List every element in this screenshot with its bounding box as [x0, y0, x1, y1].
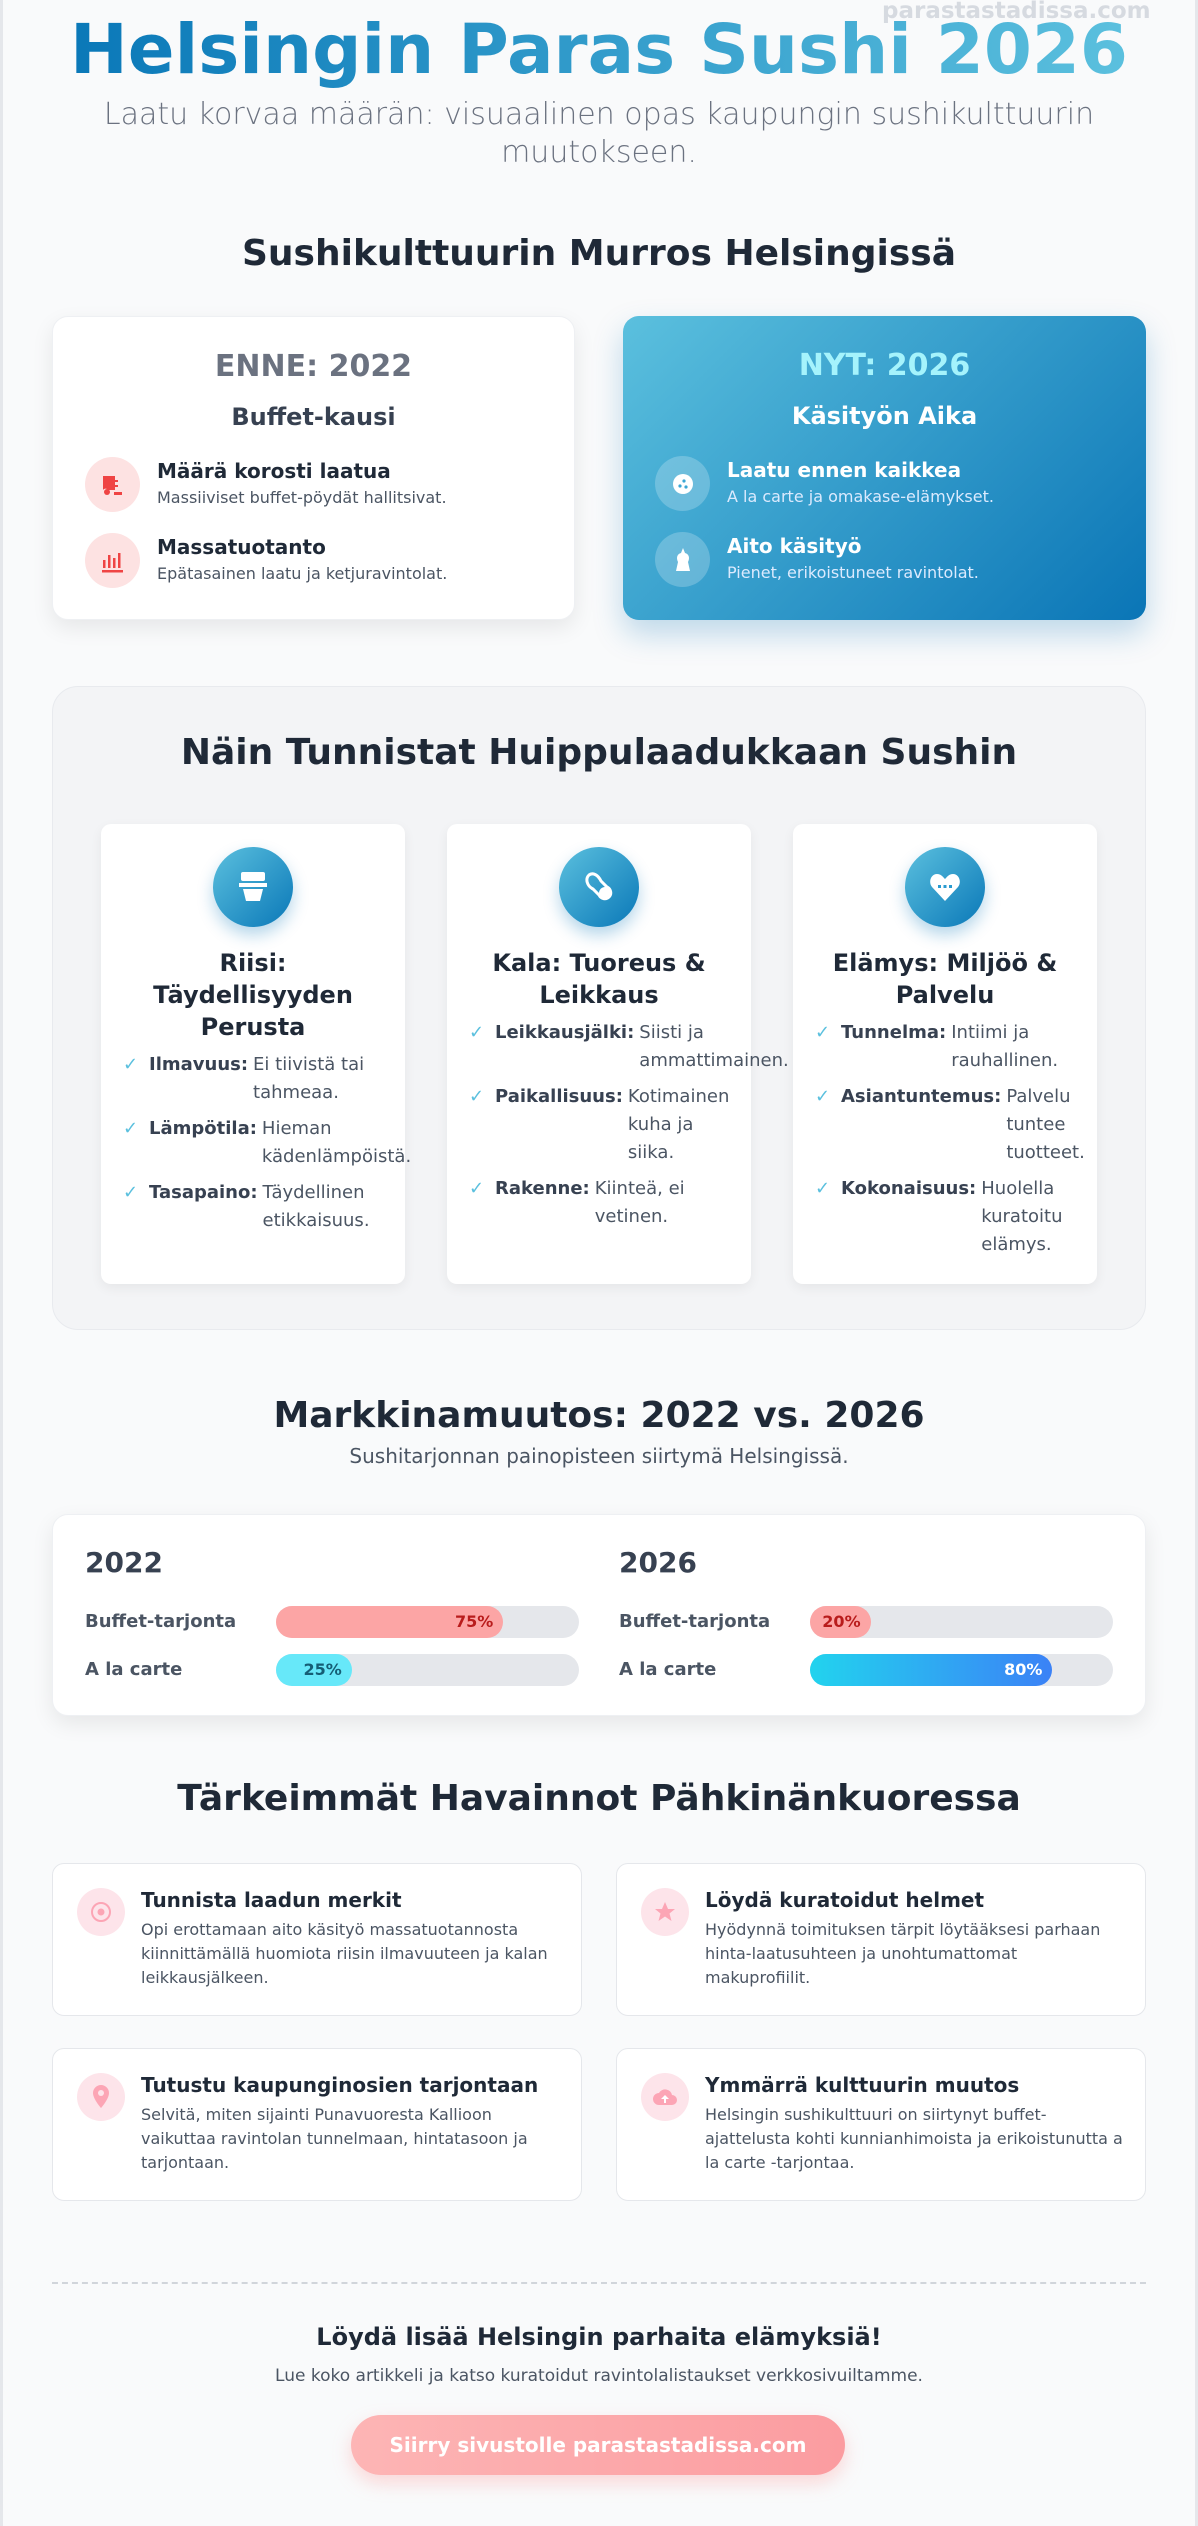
list: kala: Kiinteä, ei vetinen.	[595, 1178, 685, 1227]
card: elämys: Elämys: Miljöö &	[833, 949, 1057, 977]
chart 2022: 75%	[455, 1612, 493, 1631]
list: riisi: Ei tiivistä tai tahmeaa.	[253, 1054, 364, 1103]
item: aito: Pienet, erikoistuneet ravintolat.	[727, 563, 979, 582]
chart 2026	[619, 1546, 1113, 1686]
chart 2022: A la carte	[85, 1659, 182, 1680]
now heading: NYT: 2026	[799, 348, 970, 383]
list: kala: Siisti ja ammattimainen.	[639, 1022, 789, 1071]
list: riisi: Tasapaino:	[149, 1182, 258, 1203]
item: laatu: A la carte ja omakase-elämykset.	[727, 487, 994, 506]
panel: before 2022	[52, 316, 575, 620]
list: kala: Rakenne:	[495, 1178, 590, 1199]
card: löydä: Löydä kuratoidut helmet	[705, 1888, 984, 1912]
list: riisi: Hieman kädenlämpöistä.	[262, 1118, 411, 1167]
card: kala: Leikkaus	[539, 981, 659, 1009]
card: ymmärrä	[616, 2048, 1146, 2201]
card: tutustu: Tutustu kaupunginosien tarjontaan	[141, 2073, 538, 2097]
item: aito	[655, 532, 979, 587]
cta text: Lue koko artikkeli ja katso kuratoidut ravintolalistaukset verkkosivuiltamme.	[275, 2366, 923, 2386]
heading: key findings: Tärkeimmät Havainnot Pähkinänkuoressa	[177, 1778, 1021, 1819]
list: elämys: Palvelu tuntee tuotteet.	[1006, 1086, 1085, 1163]
list: riisi: Ilmavuus:	[149, 1054, 248, 1075]
list: kala: Kotimainen kuha ja siika.	[628, 1086, 729, 1163]
chart 2026: 80%	[1004, 1660, 1042, 1679]
list: elämys	[815, 1022, 1085, 1255]
chart 2022: 2022	[85, 1546, 163, 1579]
card: riisi: Täydellisyyden	[153, 981, 353, 1009]
list: elämys: Kokonaisuus:	[841, 1178, 976, 1199]
icon: cloud	[641, 2073, 689, 2121]
subtitle: Laatu korvaa määrän: visuaalinen opas kaupungin sushikulttuurin muutokseen.	[104, 97, 1094, 170]
now subheading: Käsityön Aika	[792, 402, 977, 430]
chart: market shift	[52, 1514, 1146, 1716]
card: tutustu: Selvitä, miten sijainti Punavuoresta Kallioon vaikuttaa ravintolan tunnelmaan, hintatasoon ja tarjontaan.	[141, 2105, 528, 2172]
heading: quality: Näin Tunnistat Huippulaadukkaan Sushin	[181, 732, 1017, 773]
card: riisi	[101, 824, 405, 1284]
list: riisi: Lämpötila:	[149, 1118, 257, 1139]
item: määrä	[85, 457, 447, 512]
panel: now 2026	[623, 316, 1146, 620]
list: elämys: ✓	[815, 1086, 830, 1107]
chart 2026: A la carte	[619, 1659, 716, 1680]
card: tunnista: Opi erottamaan aito käsityö massatuotannosta kiinnittämällä huomiota riisin ilmavuuteen ja kalan leikkausjälkeen.	[141, 1920, 548, 1987]
list: kala	[469, 1022, 789, 1227]
title: Helsingin Paras Sushi 2026	[70, 10, 1128, 90]
icon: chart	[85, 533, 140, 588]
icon: target	[77, 1888, 125, 1936]
list: riisi: Täydellinen etikkaisuus.	[263, 1182, 370, 1231]
icon: star	[641, 1888, 689, 1936]
icon: heart	[905, 847, 985, 927]
card: kala	[447, 824, 751, 1284]
card: ymmärrä: Helsingin sushikulttuuri on siirtynyt buffet-ajattelusta kohti kunnianhimoista ja erikoistunutta a la carte -tarjontaa.	[705, 2105, 1123, 2172]
card: kala: Kala: Tuoreus &	[492, 949, 706, 977]
list: kala: ✓	[469, 1086, 484, 1107]
card: tunnista: Tunnista laadun merkit	[141, 1888, 402, 1912]
item: massatuotanto	[85, 533, 447, 588]
card: elämys	[793, 824, 1097, 1284]
list: kala: ✓	[469, 1022, 484, 1043]
list: riisi: ✓	[123, 1118, 138, 1139]
list: elämys: Huolella kuratoitu elämys.	[981, 1178, 1062, 1255]
item: määrä: Massiiviset buffet-pöydät hallitsivat.	[157, 488, 447, 507]
before subheading: Buffet-kausi	[231, 403, 396, 431]
panel: quality recognition	[52, 686, 1146, 1330]
card: löydä	[616, 1863, 1146, 2016]
chart 2026: 2026	[619, 1546, 697, 1579]
market subtitle: Sushitarjonnan painopisteen siirtymä Helsingissä.	[349, 1444, 849, 1468]
icon: pin	[77, 2073, 125, 2121]
list: riisi	[123, 1054, 411, 1231]
card: ymmärrä: Ymmärrä kulttuurin muutos	[705, 2073, 1019, 2097]
cta heading: Löydä lisää Helsingin parhaita elämyksiä!	[316, 2323, 882, 2351]
item: määrä: Määrä korosti laatua	[157, 459, 391, 483]
list: riisi: ✓	[123, 1182, 138, 1203]
list: elämys: Tunnelma:	[841, 1022, 946, 1043]
icon: buffet	[85, 457, 140, 512]
item: massatuotanto: Massatuotanto	[157, 535, 326, 559]
chart 2026: 20%	[822, 1612, 861, 1631]
icon: fish	[559, 847, 639, 927]
chart 2022	[85, 1546, 579, 1686]
list: elämys: ✓	[815, 1178, 830, 1199]
list: elämys: Intiimi ja rauhallinen.	[951, 1022, 1058, 1071]
cta button	[351, 2415, 845, 2475]
chart 2022: Buffet-tarjonta	[85, 1611, 236, 1632]
card: elämys: Palvelu	[896, 981, 994, 1009]
chart 2022: 25%	[303, 1660, 342, 1679]
list: kala: ✓	[469, 1178, 484, 1199]
card: riisi: Perusta	[201, 1013, 305, 1041]
item: massatuotanto: Epätasainen laatu ja ketjuravintolat.	[157, 564, 447, 583]
card: löydä: Hyödynnä toimituksen tärpit löytääksesi parhaan hinta-laatusuhteen ja unohtumattomat makuprofiilit.	[705, 1920, 1100, 1987]
card: tutustu	[52, 2048, 582, 2201]
card: riisi: Riisi:	[219, 949, 287, 977]
icon: plate	[655, 456, 710, 511]
item: aito: Aito käsityö	[727, 534, 862, 558]
list: elämys: Asiantuntemus:	[841, 1086, 1001, 1107]
heading: market: Markkinamuutos: 2022 vs. 2026	[273, 1395, 925, 1436]
card: tunnista	[52, 1863, 582, 2016]
heading: murros: Sushikulttuurin Murros Helsingissä	[242, 233, 956, 274]
list: kala: Leikkausjälki:	[495, 1022, 634, 1043]
chart 2026: Buffet-tarjonta	[619, 1611, 770, 1632]
before heading: ENNE: 2022	[215, 349, 412, 384]
item: laatu: Laatu ennen kaikkea	[727, 458, 961, 482]
list: kala: Paikallisuus:	[495, 1086, 623, 1107]
icon: rice bowl	[213, 847, 293, 927]
cta button: Siirry sivustolle parastastadissa.com	[390, 2433, 806, 2457]
list: riisi: ✓	[123, 1054, 138, 1075]
icon: chef	[655, 532, 710, 587]
item: laatu	[655, 456, 994, 511]
list: elämys: ✓	[815, 1022, 830, 1043]
